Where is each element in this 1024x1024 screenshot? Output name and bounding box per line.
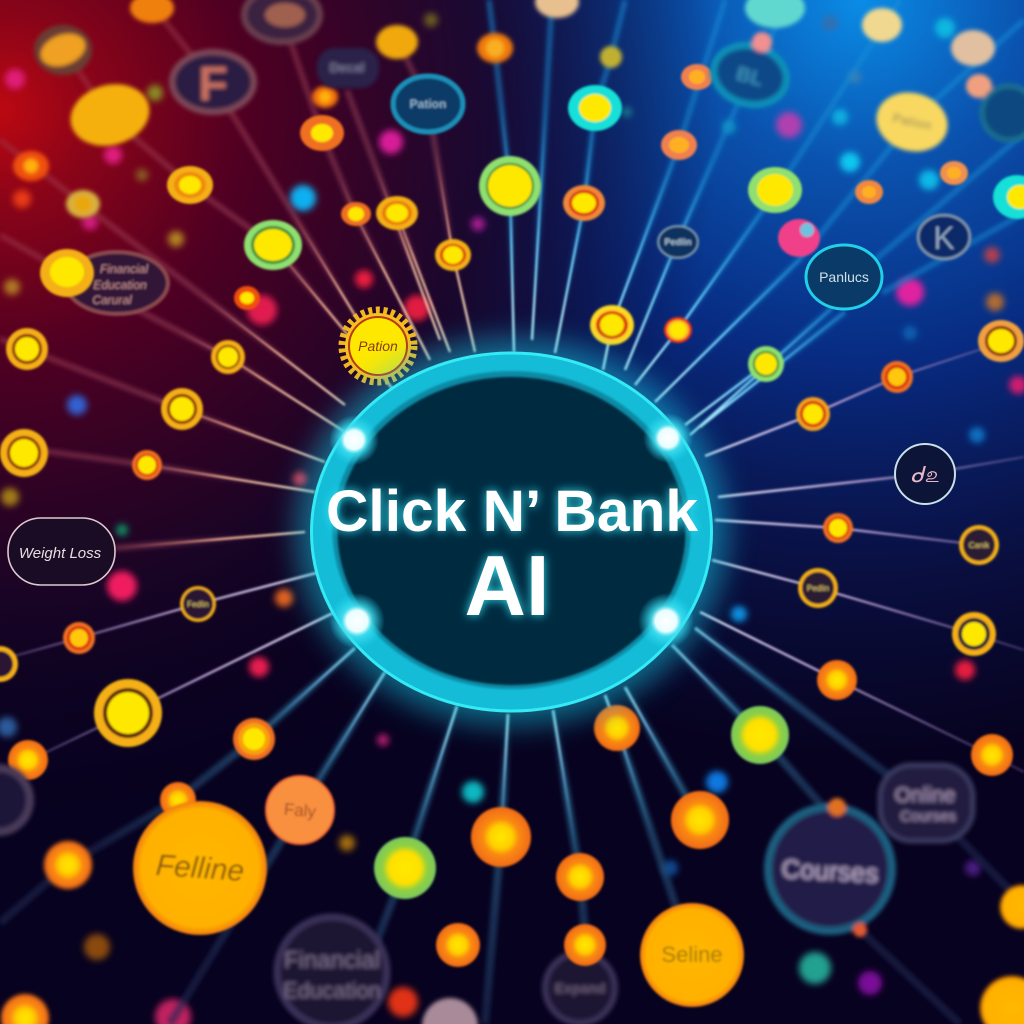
top-right blurred nodes: BL [734,63,765,91]
label: Financial Education Control: Carural [92,293,132,307]
big node: Felline [133,801,267,935]
label: K badge: K [933,220,955,256]
top-left blurred nodes [13,0,579,218]
nodes upper right and right [479,64,1024,656]
label: Financial Education Control: Financial [100,262,148,276]
bottom blurred label: Expand [555,980,605,996]
top blurred badges [244,0,379,88]
icon: gear badge Pation: Pation [358,338,398,354]
label: small Pedlin badge [658,226,698,258]
node above Expand [564,924,606,966]
hub light top left [329,415,379,465]
node: large amber beside badge [40,249,94,297]
label: Online Courses: Courses [900,808,956,825]
node: Seline [640,903,744,1007]
top-right blurred nodes [600,0,1024,159]
bottom blurred label [422,885,1024,1024]
top-left label badge: F [172,52,254,112]
blurred nodes lower left [0,768,92,1024]
label: Financial Education Control: Education [93,278,147,292]
blurred label: Financial Education: Financial [284,947,380,974]
title: Click N' Bank: Click N’ Bank [326,479,699,544]
hub inner shade [332,371,690,689]
hub glow [296,338,728,726]
hub ring [312,353,712,711]
top label badge: Pation: Pation [410,97,446,111]
big node: Felline: Felline [155,849,245,888]
label: Online Courses [880,765,973,841]
nodes lower left [0,586,275,818]
hub body [338,377,686,685]
top blurred badges: Decal [330,60,364,75]
blurred label: Financial Education [277,917,387,1024]
label: Online Courses: Online [895,784,955,807]
hub light bottom right [638,593,694,649]
central hub [296,338,728,726]
label: Financial Education Control [66,252,168,314]
label: script badge [895,444,955,504]
top-left label badge: F: F [198,58,228,111]
node: Seline: Seline [661,942,723,967]
hub light bottom left [329,593,385,649]
label: script badge: ᑯ௨ [910,462,940,487]
label: K badge [918,215,970,259]
label: Panlucs: Panlucs [819,269,869,285]
label: Courses: Courses [781,853,879,889]
label: Weight Loss [8,518,115,585]
nodes upper left [0,115,471,480]
icon: gear badge Pation [342,310,414,382]
title: AI: AI [464,539,550,634]
top label badge: Pation [393,76,463,132]
bottom nodes [374,660,1013,967]
nodes upper right and right: Pedlin [807,584,829,593]
node: Faly [266,776,334,844]
blurred label: Financial Education: Education [283,978,381,1003]
hub light top right [643,413,693,463]
nodes upper right and right: Canik [969,541,990,550]
label: Panlucs [806,245,882,309]
label: small Pedlin badge: Pedlin [664,237,692,247]
nodes lower left: Fedlin [187,600,209,609]
label: Courses [768,798,892,937]
top-right blurred nodes: Pation [891,110,933,133]
label: Weight Loss: Weight Loss [19,545,102,562]
node: Faly: Faly [283,800,317,821]
